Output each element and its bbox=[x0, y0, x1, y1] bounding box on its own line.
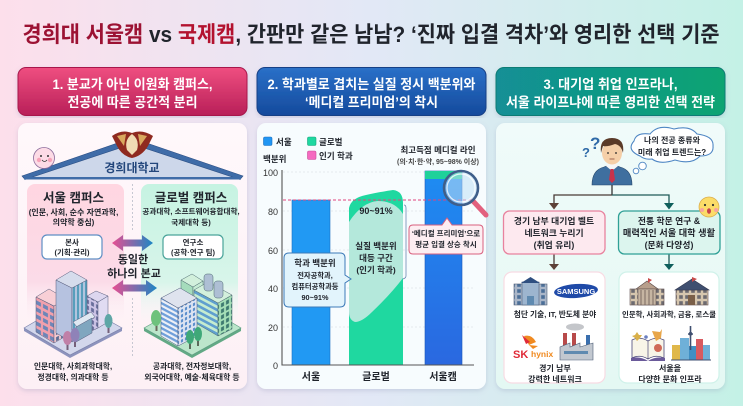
global lab box: 연구소 bbox=[183, 237, 203, 247]
callout: medical premium: 평균 입결 상승 착시 bbox=[415, 239, 477, 249]
caption: network: 경기 남부 bbox=[539, 363, 571, 373]
header tab 3: 서울 라이프냐에 따른 영리한 선택 전략 bbox=[506, 95, 716, 110]
result card: right: 다양한 문화 인프라 bbox=[638, 374, 702, 384]
arrow: top two-way bbox=[112, 235, 153, 251]
global bar labels: 대등 구간 bbox=[359, 253, 393, 263]
university name: 경희대학교 bbox=[104, 160, 160, 175]
header tab 2: ‘메디컬 프리미엄’의 착시 bbox=[305, 95, 438, 110]
icon: book bbox=[631, 329, 665, 361]
thought cloud bbox=[631, 127, 713, 174]
illustration: seoul buildings bbox=[24, 271, 122, 358]
seoul campus heading: 의약학 중심) bbox=[53, 217, 95, 227]
x axis labels: 서울 bbox=[302, 370, 320, 383]
global bar labels bbox=[355, 206, 397, 275]
seoul colleges caption: 정경대학, 의과대학 등 bbox=[37, 372, 109, 382]
result card: left bbox=[504, 272, 605, 384]
icon: university crest bbox=[112, 132, 153, 158]
callout: department percentile bbox=[284, 253, 351, 307]
seoul colleges caption bbox=[34, 361, 112, 382]
global campus zone bbox=[141, 184, 238, 324]
y axis labels: 0 bbox=[273, 361, 278, 371]
choice box: traditional studies: (문화 다양성) bbox=[645, 239, 693, 250]
logo: samsung: SAMSUNG bbox=[557, 287, 595, 296]
global campus heading: 글로벌 캠퍼스 bbox=[155, 191, 227, 205]
y axis labels bbox=[263, 168, 278, 371]
thought cloud: 나의 전공 종류와 bbox=[644, 135, 701, 145]
icon: university roof bbox=[22, 138, 243, 180]
callout: department percentile: 학과 백분위 bbox=[294, 258, 336, 268]
seoul HQ box: (기획·관리) bbox=[54, 247, 90, 257]
y axis labels: 80 bbox=[268, 207, 278, 217]
x axis labels: 글로벌 bbox=[362, 370, 390, 383]
y axis title: 백분위 bbox=[263, 154, 286, 164]
y axis labels: 20 bbox=[268, 323, 278, 333]
icon: classical hall bbox=[630, 278, 664, 305]
panel: decision tree bbox=[496, 123, 725, 389]
global campus heading bbox=[142, 191, 240, 227]
chart grid bbox=[283, 172, 474, 327]
global lab box: (공학·연구 팀) bbox=[171, 247, 216, 257]
panel: campuses bbox=[18, 123, 247, 389]
y axis labels: 40 bbox=[268, 284, 278, 294]
bracket bbox=[403, 205, 406, 279]
seoul colleges caption: 인문대학, 사회과학대학, bbox=[34, 361, 112, 371]
x axis labels bbox=[302, 370, 457, 383]
seoul campus heading: 서울 캠퍼스 bbox=[43, 191, 104, 205]
choice box: big-company belt bbox=[504, 211, 605, 254]
global campus heading: 국제대학 등) bbox=[171, 217, 211, 227]
panel: bar chart bbox=[257, 123, 486, 389]
result card: left: 강력한 네트워크 bbox=[528, 374, 583, 384]
callout: department percentile: 전자공학과, bbox=[297, 271, 333, 280]
header tab 1: 전공에 따른 공간적 분리 bbox=[68, 95, 198, 110]
icon: seoul skyline bbox=[671, 326, 711, 360]
icon: magnifier bbox=[444, 171, 486, 215]
arrowheads bbox=[549, 203, 674, 270]
global colleges caption: 외국어대학, 예술·체육대학 등 bbox=[144, 372, 240, 382]
x axis labels: 서울캠 bbox=[429, 370, 457, 383]
choice box: big-company belt: (취업 유리) bbox=[534, 239, 574, 250]
logo: sk hynix bbox=[513, 335, 553, 361]
logo: sk hynix: hynix bbox=[531, 349, 553, 359]
icon: smiley bbox=[34, 148, 54, 168]
shared campus label bbox=[107, 252, 161, 280]
connector lines bbox=[554, 185, 669, 266]
icon: question marks: ? bbox=[590, 134, 600, 153]
seoul campus heading: (인문, 사회, 순수 자연과학, bbox=[29, 207, 118, 217]
legend: 인기 학과 bbox=[319, 151, 353, 161]
icon: office building bbox=[514, 277, 547, 305]
shared campus label: 동일한 bbox=[118, 252, 148, 266]
y axis labels: 100 bbox=[263, 168, 278, 178]
caption: humanities: 인문학, 사회과학, 금융, 로스쿨 bbox=[622, 310, 716, 319]
header tab 3 bbox=[496, 68, 725, 116]
illustration: global buildings bbox=[144, 274, 241, 358]
medical line label: 최고득점 메디컬 라인 bbox=[400, 145, 476, 155]
medical line label: (의·치·한·약, 95~98% 이상) bbox=[397, 157, 479, 166]
reference dashed line bbox=[283, 199, 474, 201]
axes bbox=[282, 170, 474, 365]
bar: seoul bbox=[292, 200, 330, 365]
callout: medical premium: ‘메디컬 프리미엄’으로 bbox=[412, 228, 480, 238]
icon: factory bbox=[560, 324, 593, 360]
global bar labels: (인기 학과) bbox=[356, 265, 396, 275]
global campus heading: 공과대학, 소프트웨어융합대학, bbox=[142, 206, 240, 216]
caption: tech: 첨단 기술, IT, 반도체 분야 bbox=[514, 309, 596, 319]
header tab 1 bbox=[18, 68, 247, 116]
global lab box bbox=[163, 235, 223, 259]
choice box: big-company belt: 네트워크 누리기 bbox=[524, 227, 584, 238]
callout: department percentile: 90~91% bbox=[302, 293, 329, 302]
title: 경희대 서울캠 vs 국제캠, 간판만 같은 남남? ‘진짜 입결 격차’와 영리한 선택 기준 bbox=[22, 22, 720, 47]
icon: question marks bbox=[582, 134, 600, 160]
caption: seoul culture: 서울을 bbox=[659, 363, 682, 373]
seoul campus zone bbox=[27, 184, 124, 324]
bar: seoul campus bbox=[425, 171, 462, 365]
global bar labels: 실질 백분위 bbox=[355, 241, 397, 251]
bar: global bbox=[349, 190, 403, 365]
header tab 1: 1. 분교가 아닌 이원화 캠퍼스, bbox=[52, 77, 212, 92]
arrow: bottom two-way bbox=[112, 280, 157, 296]
seoul campus heading bbox=[29, 191, 118, 227]
y axis labels: 60 bbox=[268, 246, 278, 256]
icon: emoji bbox=[699, 197, 719, 217]
choice box: traditional studies: 매력적인 서울 대학 생활 bbox=[623, 227, 716, 238]
medical line label bbox=[397, 145, 479, 166]
global colleges caption bbox=[144, 361, 240, 382]
legend bbox=[264, 137, 353, 161]
global colleges caption: 공과대학, 전자정보대학, bbox=[153, 361, 231, 371]
thought cloud: 미래 취업 트렌드는? bbox=[638, 147, 706, 157]
shared campus label: 하나의 본교 bbox=[107, 266, 161, 280]
global bar labels: 90~91% bbox=[359, 206, 393, 216]
choice box: traditional studies: 전통 학문 연구 & bbox=[638, 215, 701, 226]
header tab 3: 3. 대기업 취업 인프라나, bbox=[544, 77, 678, 92]
icon: question marks: ? bbox=[582, 145, 590, 160]
header tab 2: 2. 학과별로 겹치는 실질 정시 백분위와 bbox=[268, 77, 476, 92]
icon: student bbox=[592, 138, 632, 185]
callout: medical premium bbox=[409, 218, 483, 254]
result card: right bbox=[619, 272, 719, 384]
choice box: traditional studies bbox=[618, 211, 720, 254]
legend: 서울 bbox=[276, 137, 292, 147]
popular department overlap band bbox=[349, 201, 403, 322]
logo: sk hynix: SK bbox=[513, 349, 528, 361]
legend: 글로벌 bbox=[319, 137, 343, 147]
choice box: big-company belt: 경기 남부 대기업 벨트 bbox=[514, 215, 594, 226]
seoul HQ box bbox=[42, 235, 102, 259]
header tab 2 bbox=[257, 68, 486, 116]
seoul HQ box: 본사 bbox=[65, 237, 79, 247]
callout: department percentile: 컴퓨터공학과등 bbox=[292, 282, 339, 291]
icon: campus hall bbox=[675, 277, 709, 305]
